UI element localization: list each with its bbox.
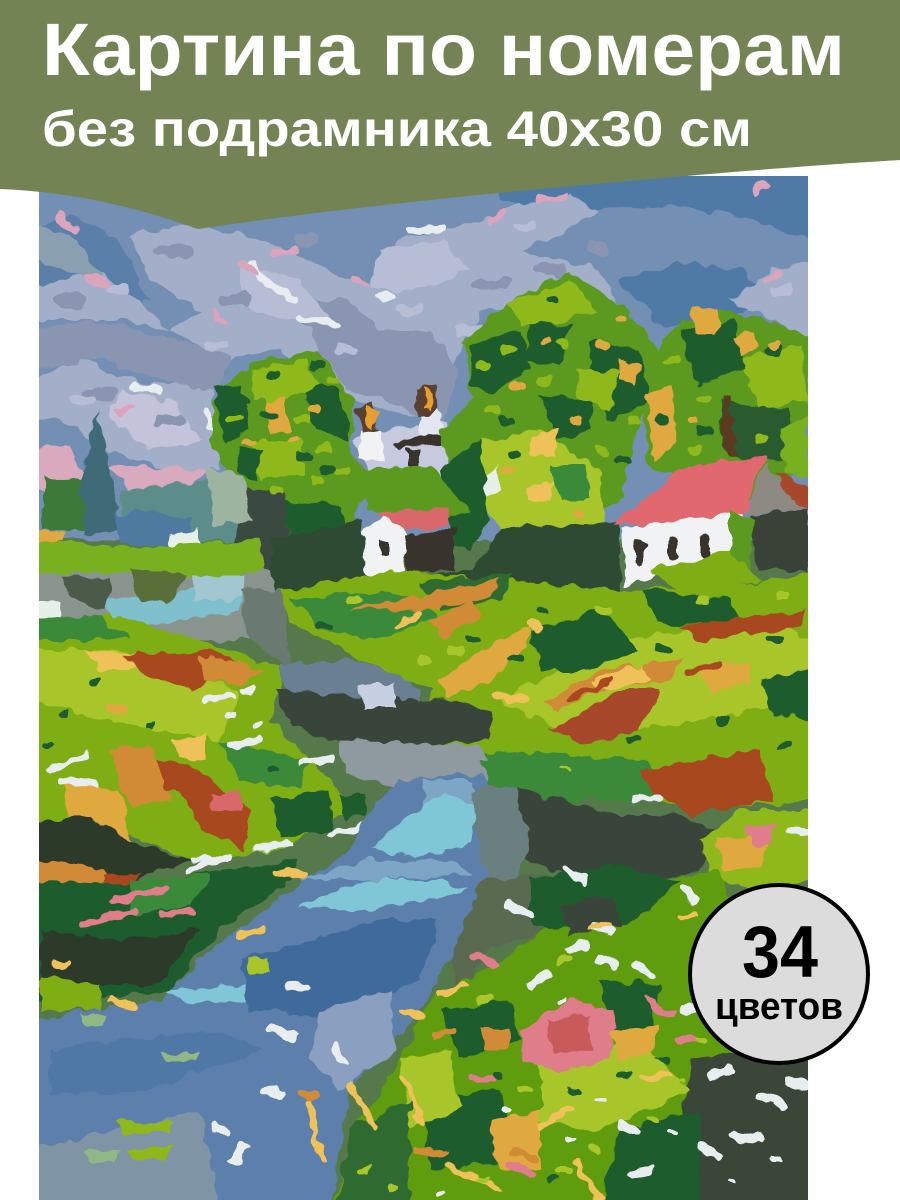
title: Картина по номерам — [42, 8, 845, 91]
right hillside — [280, 570, 815, 815]
dark left bank — [30, 815, 305, 1012]
flowering foreground — [215, 865, 815, 1200]
sky and clouds — [30, 170, 830, 495]
header banner — [0, 0, 900, 229]
subtitle: без подрамника 40х30 см — [42, 101, 752, 157]
dark belt behind houses — [270, 440, 620, 610]
badge: 34 colours: 34 — [742, 912, 818, 993]
left meadow — [30, 615, 375, 870]
right house — [613, 455, 808, 600]
river — [30, 660, 510, 1200]
distant trees — [40, 412, 250, 548]
left house — [362, 508, 455, 575]
dark right river bank — [450, 760, 815, 990]
badge: 34 colours — [690, 885, 868, 1063]
badge: 34 colours: цветов — [715, 986, 843, 1028]
far field and left pond — [30, 530, 290, 670]
large right trees — [440, 270, 808, 540]
painting: village landscape with river — [30, 170, 830, 1200]
land underlay — [30, 540, 815, 1200]
church — [352, 384, 449, 477]
centre tree — [205, 350, 365, 570]
